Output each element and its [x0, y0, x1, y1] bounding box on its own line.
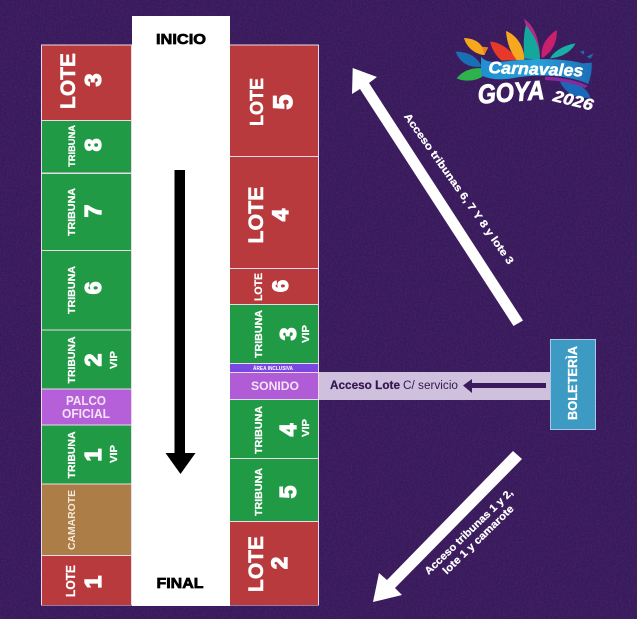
lote 1: LOTE: [64, 565, 78, 597]
area inclusiva: [230, 364, 318, 372]
tribuna 6: [42, 251, 131, 330]
tribuna 2 vip: VIP: [109, 351, 120, 369]
text: acceso lote: Acceso Lote: [330, 380, 400, 392]
lote 5: [230, 46, 318, 156]
tribuna 2 vip: [42, 330, 131, 388]
tribuna 1 vip: TRIBUNA: [67, 432, 78, 478]
arrow: acceso tribunas 1 2: [373, 451, 522, 602]
tribuna 4 vip: VIP: [301, 419, 312, 437]
lote 6: 6: [268, 280, 293, 292]
tribuna 5: [230, 459, 318, 521]
tribuna 8: 8: [80, 138, 106, 151]
lote 6: [230, 269, 318, 304]
tribuna 5: 5: [275, 485, 301, 498]
tribuna 8: [42, 121, 131, 172]
lote 3: [42, 46, 131, 120]
tribuna 6: 6: [80, 282, 106, 294]
tribuna 1 vip: VIP: [109, 445, 120, 463]
lote 4: [230, 157, 318, 268]
lote 6: LOTE: [253, 273, 265, 301]
tribuna 1 vip: [42, 426, 131, 484]
camarote: CAMAROTE: [67, 490, 78, 550]
tribuna 3 vip: 3: [275, 328, 301, 340]
lote 4: 4: [268, 208, 293, 221]
logo: carnavales goya 2026: [456, 19, 595, 114]
tribuna 8: TRIBUNA: [67, 124, 77, 167]
sonido: [230, 373, 318, 399]
tribuna 6: TRIBUNA: [67, 266, 78, 314]
text: acceso lote: [330, 380, 458, 392]
panel: right column: [230, 46, 318, 605]
tribuna 1 vip: 1: [80, 448, 106, 461]
lote 5: 5: [268, 94, 298, 110]
arrow: parade direction: [166, 170, 196, 474]
panel: parade route: [132, 16, 230, 606]
panel: route map frame: [41, 44, 319, 606]
tribuna 3 vip: TRIBUNA: [254, 310, 265, 358]
tribuna 5: TRIBUNA: [254, 468, 265, 516]
text: acceso tribunas 1 2: Acceso tribunas 1 y 2,: [422, 487, 516, 577]
sonido: SONIDO: [251, 379, 299, 393]
lote 3: 3: [80, 74, 106, 86]
panel: left column: [42, 46, 131, 605]
lote 3: LOTE: [57, 53, 80, 109]
tribuna 4 vip: 4: [275, 423, 301, 436]
boleteria: [550, 340, 596, 430]
area inclusiva: ÁREA INCLUSIVA: [253, 365, 293, 372]
tribuna 7: [42, 174, 131, 250]
camarote: [42, 484, 131, 555]
tribuna 7: 7: [80, 205, 106, 217]
logo: carnavales goya 2026: GOYA: [477, 75, 545, 110]
logo: carnavales goya 2026: Carnavales: [488, 58, 584, 80]
lote 2: [230, 522, 318, 605]
tribuna 4 vip: [230, 400, 318, 458]
text: acceso tribunas 6 7 8: Acceso tribunas 6, 7 Y 8 y lote 3: [401, 111, 516, 267]
tribuna 2 vip: 2: [80, 354, 106, 366]
logo: carnavales goya 2026: 2026: [550, 88, 595, 114]
panel: acceso lote band: [319, 372, 550, 400]
lote 5: LOTE: [247, 78, 267, 126]
tribuna 4 vip: TRIBUNA: [254, 406, 265, 454]
tribuna 7: TRIBUNA: [67, 188, 78, 236]
arrow: acceso lote: [463, 379, 546, 393]
arrow: acceso tribunas 6 7 8: [352, 68, 523, 326]
lote 2: LOTE: [245, 536, 268, 592]
lote 1: [42, 556, 131, 605]
heading: final: FINAL: [156, 575, 204, 592]
palco oficial: OFICIAL: [62, 407, 110, 421]
text: acceso tribunas 1 2: lote 1 y camarote: [441, 503, 517, 577]
palco oficial: PALCO: [66, 394, 106, 408]
text: acceso lote: C/ servicio: [403, 380, 458, 392]
lote 2: 2: [267, 557, 292, 569]
boleteria: BOLETERÌA: [565, 346, 580, 420]
palco oficial: [42, 390, 131, 424]
heading: inicio: INICIO: [156, 31, 206, 48]
lote 4: LOTE: [245, 186, 268, 244]
tribuna 3 vip: [230, 305, 318, 363]
lote 1: 1: [80, 575, 106, 588]
tribuna 2 vip: TRIBUNA: [67, 336, 78, 384]
tribuna 3 vip: VIP: [301, 325, 312, 343]
